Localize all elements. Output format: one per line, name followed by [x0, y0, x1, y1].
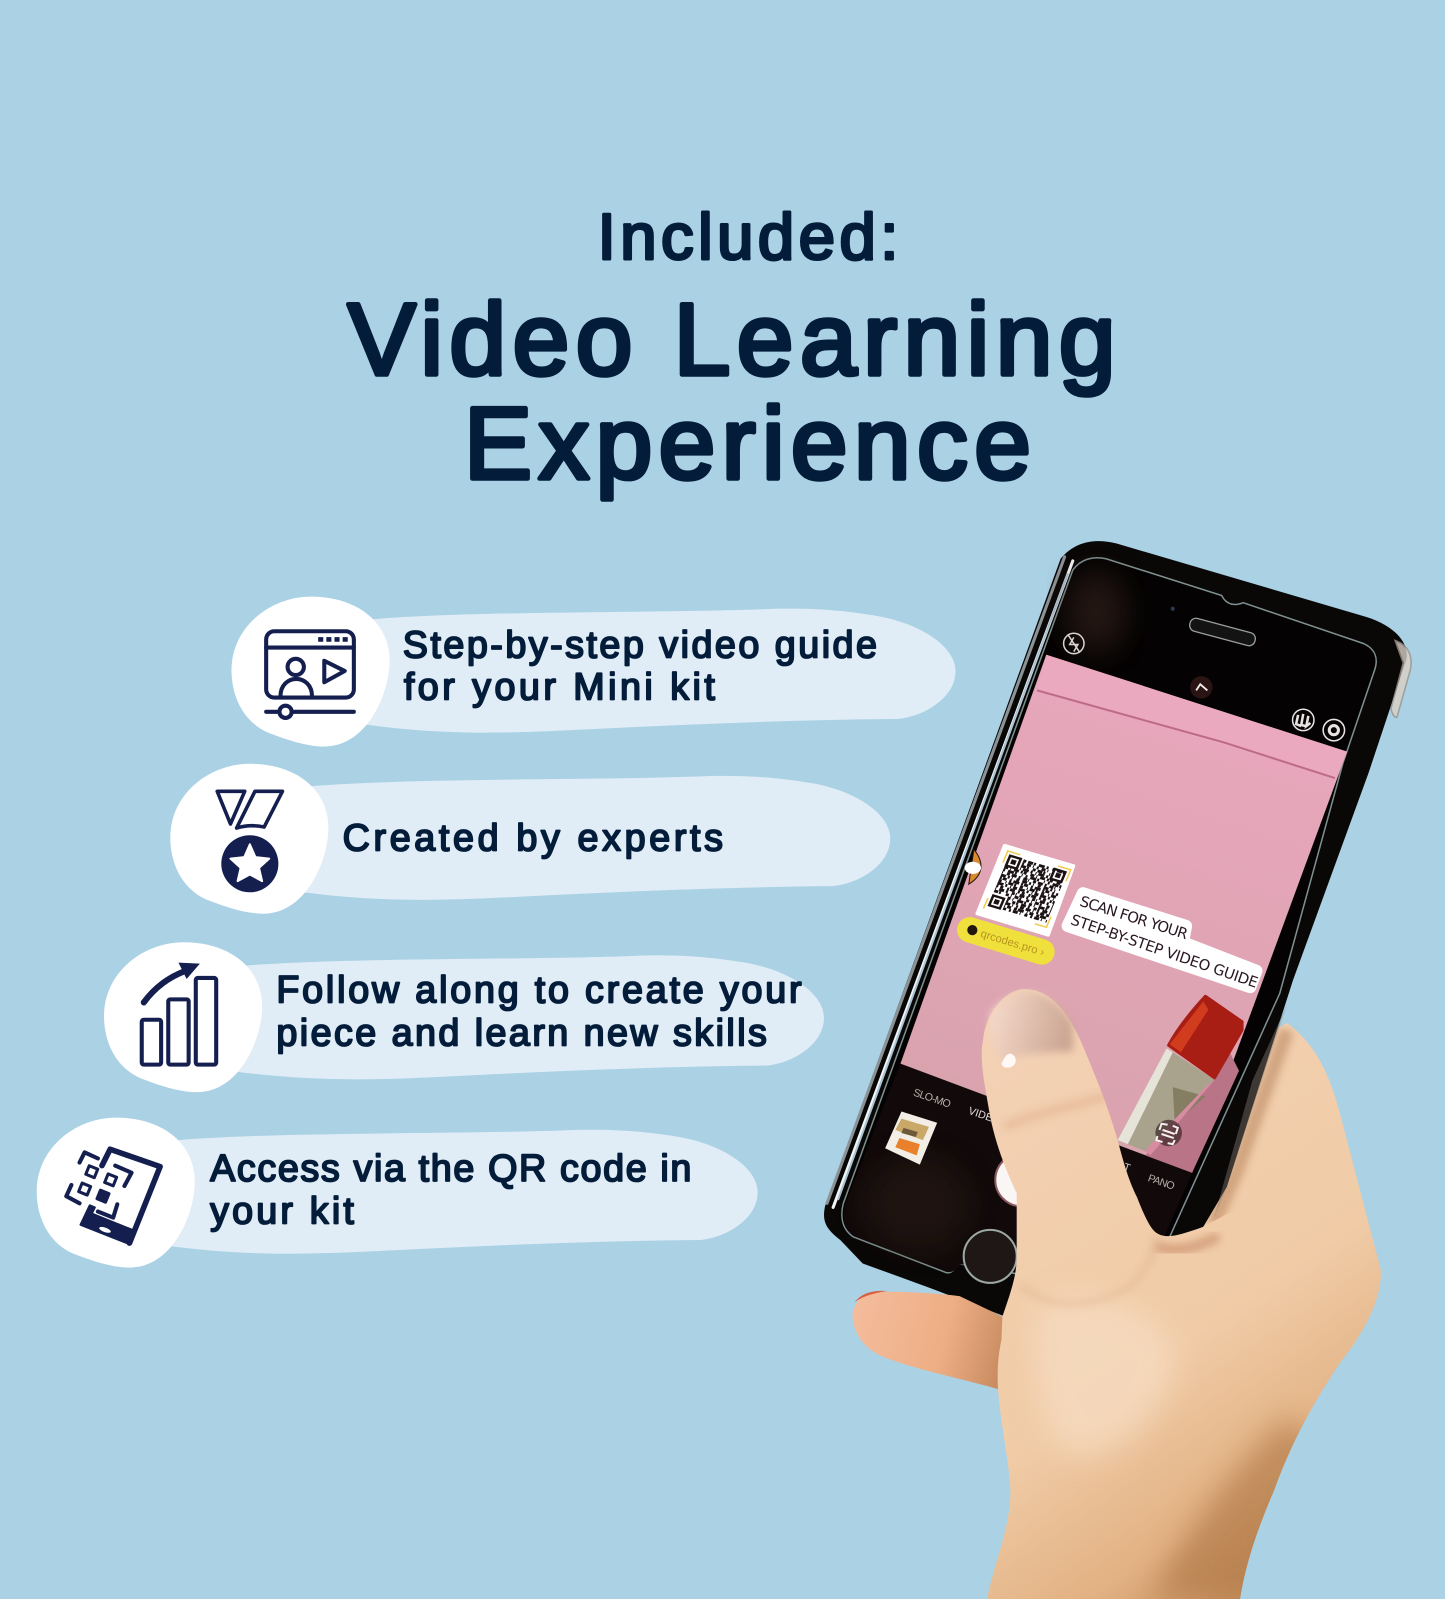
clear case right edge	[1214, 1004, 1287, 1220]
icon: medal	[217, 791, 282, 892]
pink camera view	[900, 655, 1347, 1173]
bottom camera bar	[844, 1064, 1192, 1272]
home button	[964, 1230, 1017, 1283]
nail highlight	[1001, 1054, 1016, 1068]
phone speaker	[1188, 617, 1257, 647]
hand: thumb and palm	[982, 989, 1381, 1599]
clear case corner	[1391, 640, 1411, 717]
hand: fingers behind phone	[1152, 1023, 1381, 1326]
paint brush	[1118, 996, 1242, 1173]
text: step-by-step: for your Mini kit	[404, 666, 715, 708]
icon: growth chart	[142, 963, 216, 1065]
text: created by experts: Created by experts	[343, 816, 723, 858]
text: follow along	[276, 968, 802, 1053]
title: Video Learning Experience: Experience	[464, 386, 1031, 500]
scan caption sticker: STEP-BY-STEP VIDEO GUIDE	[1068, 912, 1260, 992]
pill background 2	[281, 776, 890, 900]
text: follow along: piece and learn new skills	[276, 1011, 767, 1053]
scan caption sticker: SCAN FOR YOUR	[1078, 893, 1190, 943]
shadow beside phone	[1214, 1030, 1287, 1224]
camera mode labels: VIDEO	[967, 1105, 1002, 1127]
camera mode labels: SLO-MO	[912, 1087, 952, 1111]
pink fold	[1037, 655, 1347, 778]
QR sticker	[977, 845, 1074, 935]
icon blob 4	[37, 1118, 195, 1268]
pill background 1	[347, 609, 956, 733]
camera mode labels: T	[1122, 1161, 1132, 1175]
panel: access via QR	[37, 1118, 758, 1268]
icon: video player	[266, 631, 354, 718]
text: access via QR	[210, 1147, 691, 1232]
skin shading	[1004, 1096, 1326, 1599]
text: access via QR: Access via the QR code in	[210, 1147, 691, 1189]
yellow qrcodes.pro pill: qrcodes.pro ›	[979, 928, 1046, 959]
thumbnail	[990, 992, 1073, 1060]
fingernail	[855, 1291, 887, 1302]
icon blob 3	[104, 942, 262, 1092]
shutter button	[995, 1153, 1048, 1206]
title: Video Learning Experience: Video Learning	[348, 282, 1116, 396]
camera mode labels: PANO	[1146, 1172, 1176, 1193]
text: access via QR: your kit	[210, 1190, 354, 1232]
yellow qrcodes.pro pill	[954, 914, 1058, 968]
panel: step-by-step video guide	[231, 597, 956, 746]
focus icon	[1155, 1120, 1182, 1146]
phone case	[824, 541, 1407, 1346]
case highlights	[827, 557, 1073, 1207]
phone screen glass	[842, 558, 1376, 1285]
heading: Included: Included:	[598, 200, 898, 273]
phone	[824, 541, 1411, 1346]
gallery thumbnail	[885, 1112, 937, 1165]
panel: created by experts	[170, 764, 890, 914]
sticker peeking at left edge	[965, 849, 981, 884]
chevron	[1190, 676, 1212, 699]
camera mode labels	[912, 1087, 1176, 1193]
hand: index finger	[853, 1291, 1004, 1391]
camera dot	[1171, 607, 1175, 611]
screen glow	[1066, 571, 1127, 653]
icon blob 1	[231, 597, 390, 746]
title: Video Learning Experience	[348, 282, 1116, 500]
flash icon	[1064, 633, 1084, 654]
icon blob 2	[170, 764, 328, 914]
QR code	[983, 851, 1071, 927]
text: step-by-step: Step-by-step video guide	[403, 624, 877, 666]
panel: follow along	[104, 942, 824, 1092]
text: step-by-step	[403, 624, 877, 708]
icon: tablet with QR code	[66, 1149, 160, 1244]
camera mode icons	[1293, 709, 1345, 741]
text: follow along: Follow along to create your	[276, 968, 802, 1010]
pill background 4	[149, 1130, 758, 1254]
pill background 3	[215, 955, 824, 1079]
